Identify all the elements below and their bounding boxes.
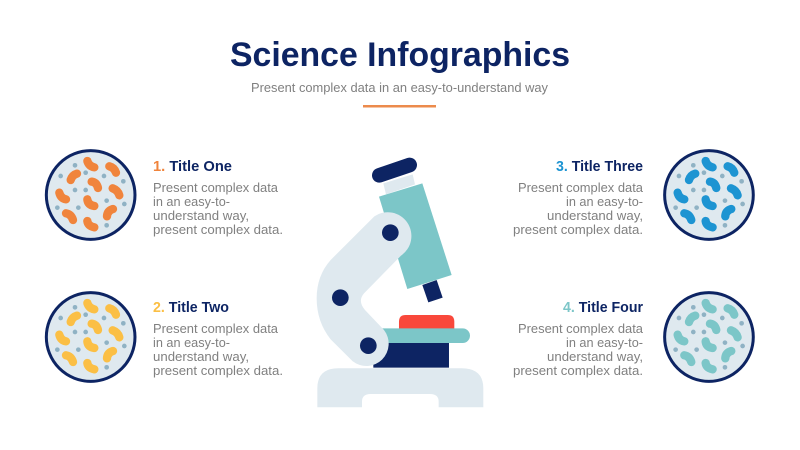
body: title one: present complex data. [153, 222, 283, 237]
orange divider [363, 105, 436, 108]
block: title two [153, 299, 283, 378]
red sample [399, 315, 454, 329]
icon: orange petri dish [46, 151, 135, 239]
heading: title one: 1. Title One [153, 158, 232, 175]
body: title one: understand way, [153, 208, 249, 223]
body: title four [513, 321, 644, 378]
body: title one: Present complex data [153, 180, 279, 195]
body: title one: in an easy-to- [153, 194, 230, 209]
body: title four: present complex data. [513, 363, 643, 378]
stage [380, 328, 470, 343]
block: title three [513, 158, 644, 237]
arm [317, 212, 411, 366]
icon: teal petri dish [665, 293, 753, 381]
body: title two [153, 321, 283, 378]
body: title three: present complex data. [513, 222, 643, 237]
icon: yellow petri dish [46, 293, 135, 381]
body: title two: in an easy-to- [153, 335, 230, 350]
body: title four: Present complex data [518, 321, 644, 336]
microscope base [317, 368, 483, 407]
eyepiece [379, 165, 410, 175]
arm joints [332, 224, 399, 354]
title: Science Infographics [230, 36, 570, 74]
block: title one [153, 158, 283, 237]
subtitle: Present complex data in an easy-to-understand way [251, 80, 548, 95]
block under stage [373, 342, 449, 368]
body: title three [513, 180, 644, 237]
body: title four: understand way, [547, 349, 643, 364]
body: title two: present complex data. [153, 363, 283, 378]
heading: title two: 2. Title Two [153, 299, 229, 316]
body: title one [153, 180, 283, 237]
objective lens [422, 280, 443, 302]
heading: title three: 3. Title Three [556, 158, 643, 175]
body: title three: in an easy-to- [566, 194, 643, 209]
microscope [317, 165, 483, 407]
tube [379, 183, 452, 289]
block: title four [513, 299, 644, 378]
neck [383, 174, 415, 194]
body: title two: understand way, [153, 349, 249, 364]
icon: blue petri dish [665, 151, 753, 239]
body: title four: in an easy-to- [566, 335, 643, 350]
body: title three: understand way, [547, 208, 643, 223]
body: title two: Present complex data [153, 321, 279, 336]
body: title three: Present complex data [518, 180, 644, 195]
heading: title four: 4. Title Four [563, 299, 643, 316]
